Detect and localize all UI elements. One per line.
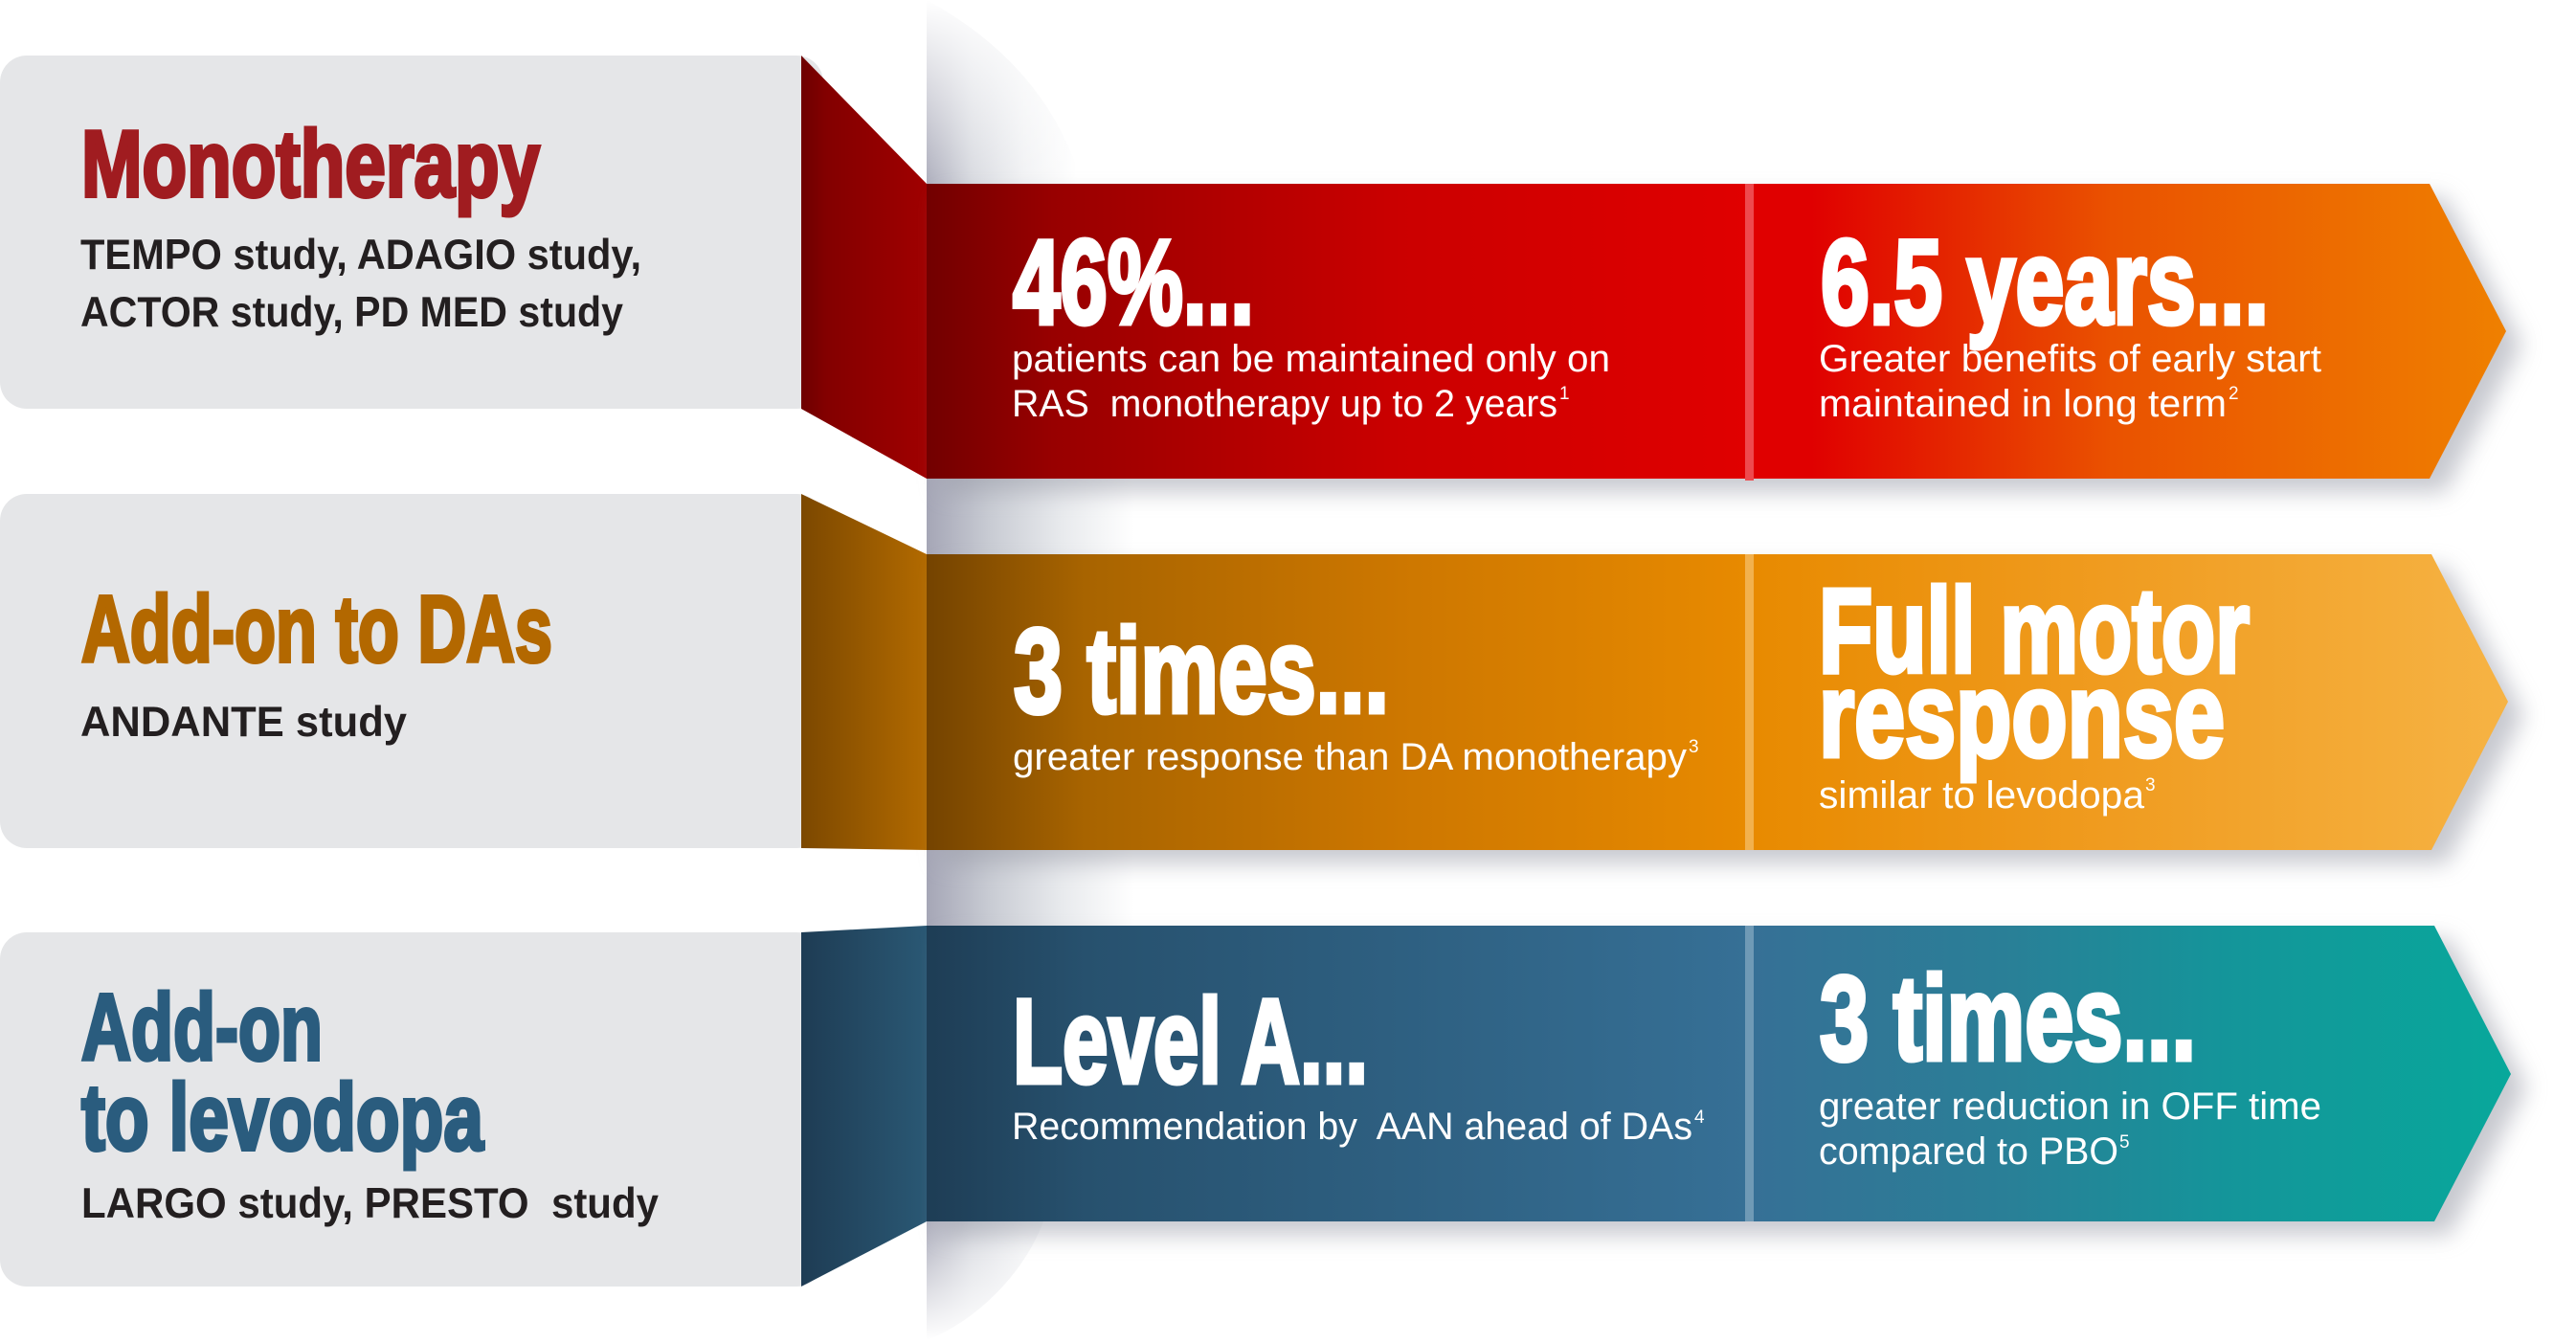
text: ANDANTE study: ANDANTE study — [80, 699, 407, 746]
stat: 3 times OFF time: greater reduction in OFF time — [1819, 1086, 2321, 1128]
stat: 6.5 years: maintained in long term — [1819, 383, 2227, 425]
row: add-on to DAs — [0, 494, 2523, 863]
divider: arrow two — [1745, 554, 1754, 850]
stat: 3 times: 3 — [1689, 737, 1699, 757]
divider: arrow one — [1745, 184, 1754, 481]
stat: 46 percent: 46%... — [1013, 216, 1254, 349]
heading: monotherapy: Monotherapy — [81, 111, 540, 216]
stat: full motor response — [1819, 565, 2250, 817]
stat: 3 times: 3 times... — [1014, 605, 1389, 738]
stat: 3 times: greater response than DA monotherapy — [1013, 736, 1687, 778]
stat: 46 percent — [1012, 216, 1610, 425]
text: monotherapy studies: ACTOR study, PD MED study — [80, 289, 623, 336]
shadow: arrow three — [942, 939, 2526, 1235]
divider: arrow three — [1745, 926, 1754, 1221]
stat: 6.5 years: Greater benefits of early start — [1819, 338, 2321, 380]
stat: 46 percent: 1 — [1559, 384, 1570, 404]
stat: level A: Level A... — [1013, 975, 1368, 1108]
stat: level A — [1012, 975, 1705, 1148]
row: monotherapy — [0, 56, 2521, 492]
shadow: arrow two — [942, 568, 2523, 863]
stat: 3 times OFF time: 3 times... — [1820, 952, 2196, 1086]
background vertical shadow below third arrow — [927, 1221, 1051, 1342]
heading: add-on to levodopa: Add-on — [81, 974, 323, 1080]
stat: 3 times OFF time — [1819, 952, 2321, 1173]
text: monotherapy studies — [80, 232, 641, 336]
heading: add-on to DAs: Add-on to DAs — [81, 576, 552, 682]
heading: add-on to levodopa: to levodopa — [81, 1064, 484, 1170]
stat: 46 percent: RAS monotherapy up to 2 years — [1012, 383, 1557, 425]
shadow between second and third arrows — [927, 847, 1134, 929]
stat: 6.5 years: 6.5 years... — [1821, 216, 2269, 349]
text: monotherapy studies: TEMPO study, ADAGIO study, — [80, 232, 641, 279]
shadow between first and second arrows — [927, 474, 1134, 560]
stat: 46 percent: patients can be maintained only on — [1012, 338, 1610, 380]
arrow: add-on to levodopa — [927, 926, 2511, 1221]
row: add-on to levodopa — [0, 926, 2526, 1287]
stat: level A: 4 — [1694, 1108, 1705, 1128]
shadow: arrow one — [942, 197, 2521, 492]
stat: level A: Recommendation by AAN ahead of DAs — [1012, 1106, 1692, 1148]
arrow: monotherapy — [927, 184, 2506, 479]
panel: add-on to levodopa label — [0, 932, 823, 1287]
fold: monotherapy — [801, 56, 927, 479]
stat: full motor response: similar to levodopa — [1819, 774, 2144, 817]
stat: full motor response: response — [1819, 649, 2225, 782]
fold: add-on to DAs — [801, 494, 927, 850]
heading: add-on to levodopa — [81, 974, 484, 1170]
stat: full motor response: Full motor — [1819, 565, 2250, 698]
stat: 6.5 years — [1819, 216, 2321, 425]
arrow: add-on to DAs — [927, 554, 2508, 850]
panel: add-on to DAs label — [0, 494, 823, 848]
stat: 3 times OFF time: compared to PBO — [1819, 1130, 2118, 1173]
stat: 3 times — [1013, 605, 1699, 778]
stat: full motor response: 3 — [2145, 775, 2156, 795]
text: LARGO and PRESTO studies: LARGO study, PRESTO study — [81, 1180, 659, 1227]
panel: monotherapy label — [0, 56, 823, 409]
background vertical shadow above first arrow — [927, 0, 1089, 184]
stat: 6.5 years: 2 — [2229, 384, 2239, 404]
fold: add-on to levodopa — [801, 926, 927, 1287]
stat: 3 times OFF time: 5 — [2119, 1132, 2130, 1153]
